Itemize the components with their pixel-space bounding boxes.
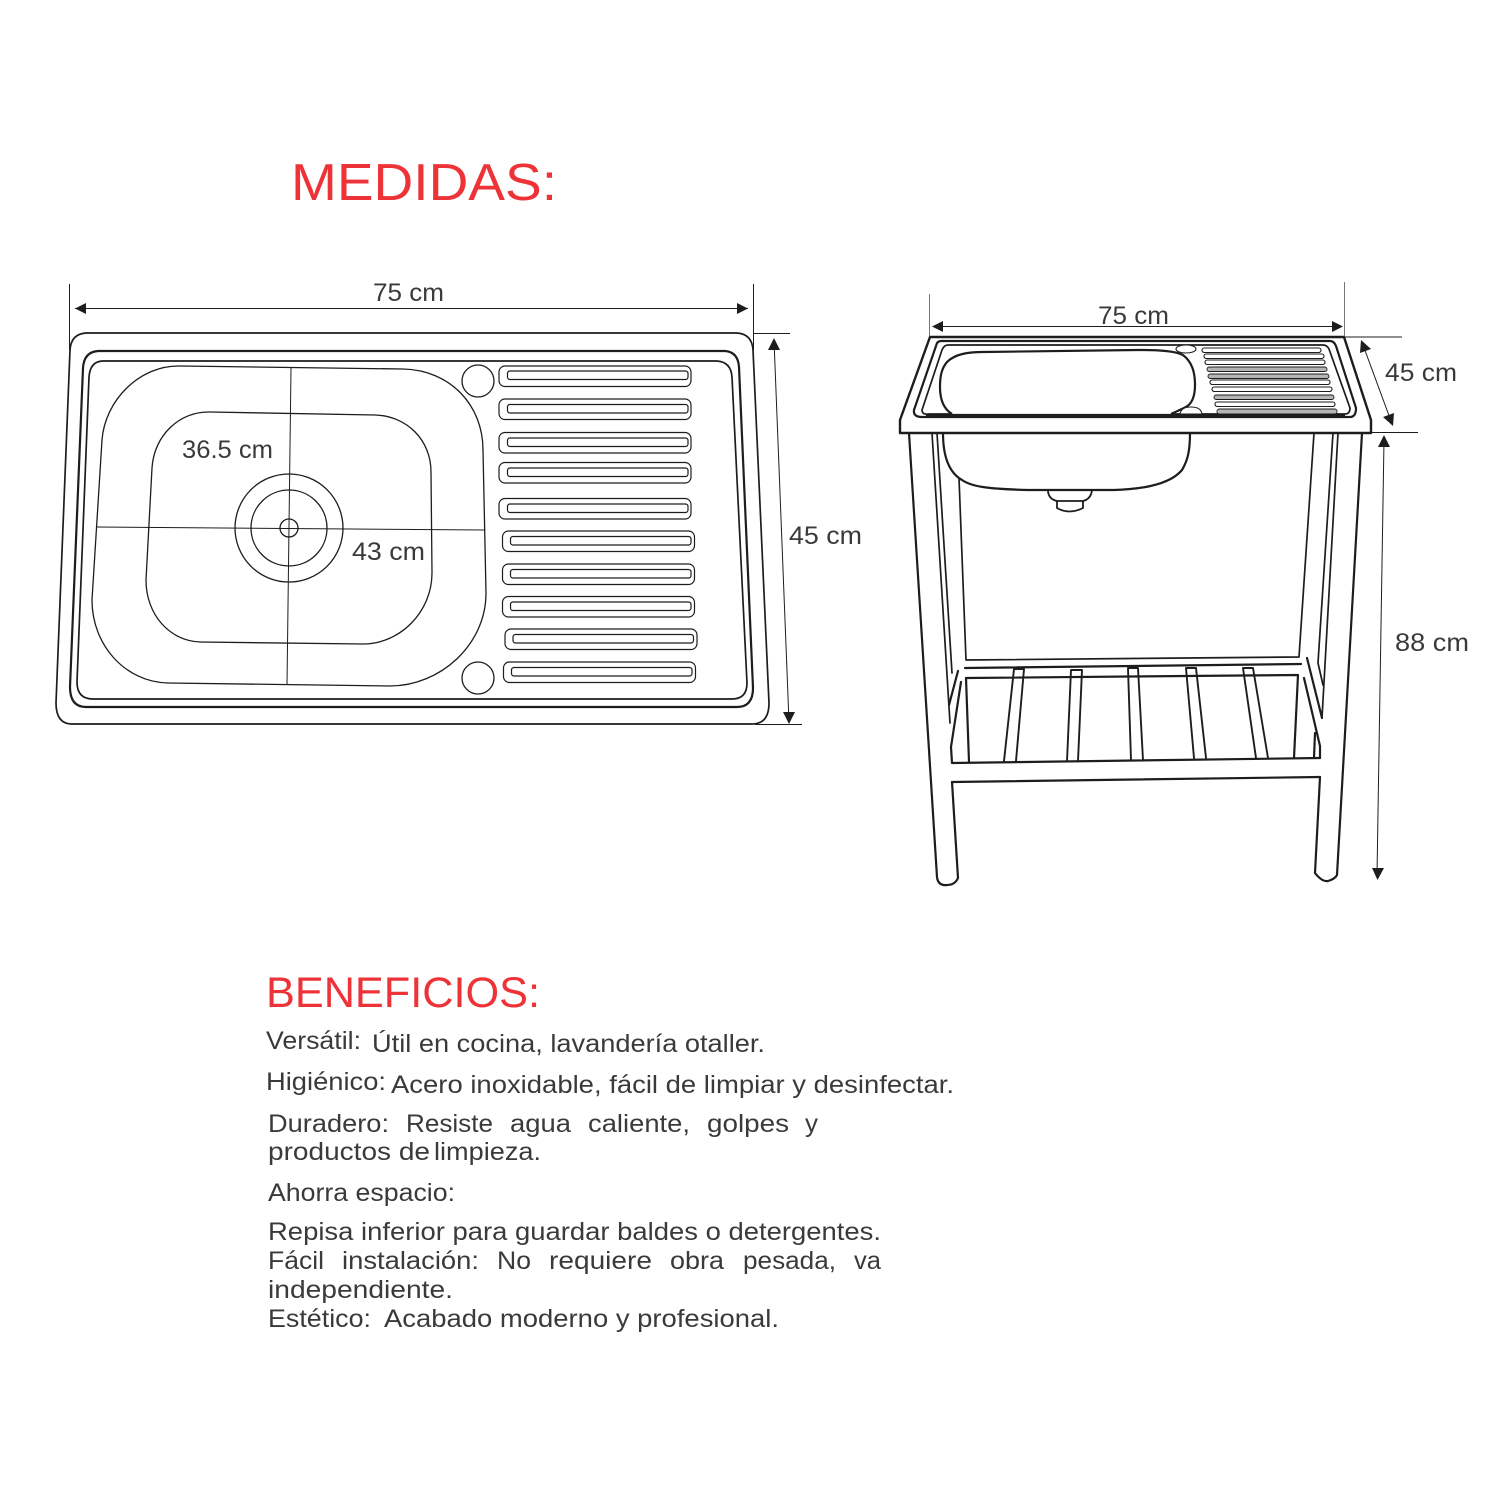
benefit: easy installation: independiente.	[268, 1276, 453, 1304]
basin outer edge	[92, 366, 486, 686]
benefit: easy installation: instalación:	[342, 1247, 479, 1275]
benefit: easy installation	[268, 1247, 881, 1304]
dimension lines: depth	[753, 334, 802, 724]
benefit: durable: golpes	[707, 1110, 789, 1138]
front right leg	[1315, 433, 1362, 881]
benefit: hygienic: Acero inoxidable, fácil de limpiar y desinfectar.	[391, 1071, 954, 1099]
label: height: 88 cm	[1395, 629, 1469, 657]
diagram: sink top view	[56, 279, 862, 724]
drain circles	[235, 474, 343, 582]
bowl front edge	[926, 414, 1345, 416]
sink middle rim	[70, 351, 753, 707]
benefit: aesthetic: Estético:	[268, 1305, 371, 1333]
label: width: 75 cm	[373, 279, 444, 307]
benefit: versatile	[266, 1027, 765, 1058]
benefit: durable: agua	[510, 1110, 571, 1138]
benefit: hygienic: Higiénico:	[266, 1068, 386, 1096]
shelf frame	[949, 658, 1322, 763]
benefit: easy installation: Fácil	[268, 1247, 324, 1275]
counter inner rim	[922, 345, 1350, 414]
title: medidas: MEDIDAS:	[291, 154, 557, 212]
basin underside	[943, 433, 1190, 490]
dimension lines: depth	[1344, 337, 1418, 432]
benefit: durable: Duradero:	[268, 1110, 389, 1138]
dimension lines: width	[930, 282, 1344, 336]
benefit: versatile: Útil en cocina, lavandería otaller.	[372, 1029, 765, 1058]
benefit: durable: Resiste	[406, 1110, 493, 1138]
label: depth: 45 cm	[1385, 359, 1457, 387]
faucet holes	[1176, 345, 1202, 414]
drainboard grooves	[1202, 348, 1337, 414]
benefit: easy installation: requiere	[549, 1247, 652, 1275]
benefit: saves space	[268, 1179, 881, 1246]
benefits text block	[266, 1027, 954, 1333]
drainboard grooves	[499, 366, 697, 682]
benefit: durable: limpieza.	[434, 1138, 541, 1166]
basin inner edge	[146, 412, 432, 644]
benefit: durable: y	[805, 1110, 819, 1138]
counter outer rim	[914, 341, 1356, 417]
label: depth: 45 cm	[789, 522, 862, 550]
label: basin depth: 36.5 cm	[182, 436, 273, 464]
benefit: hygienic	[266, 1068, 954, 1099]
heading: beneficios: BENEFICIOS:	[266, 969, 540, 1017]
drain fitting	[1048, 490, 1092, 512]
benefit: durable: productos de	[268, 1138, 430, 1166]
dimension lines: height	[1372, 435, 1390, 880]
label: width: 75 cm	[1098, 302, 1169, 330]
shelf slats	[1004, 668, 1268, 761]
lower crossbar	[952, 777, 1320, 782]
benefit: versatile: Versátil:	[266, 1027, 361, 1055]
benefit: saves space: Ahorra espacio:	[268, 1179, 455, 1207]
bowl opening	[940, 350, 1195, 414]
faucet holes	[462, 365, 494, 694]
sink outer rim	[56, 333, 769, 724]
benefit: aesthetic: Acabado moderno y profesional.	[384, 1305, 779, 1333]
rear and inner legs	[932, 433, 1338, 723]
basin centre lines	[97, 368, 485, 685]
label: basin width: 43 cm	[352, 538, 425, 566]
sink inner rim	[77, 361, 747, 699]
benefit: durable: caliente,	[588, 1110, 690, 1138]
benefit: easy installation: No	[497, 1247, 531, 1275]
benefit: durable	[268, 1110, 819, 1166]
benefit: saves space: Repisa inferior para guardar baldes o detergentes.	[268, 1218, 881, 1246]
front left leg	[909, 433, 958, 885]
diagram: sink with stand, front view	[900, 282, 1469, 885]
benefit: easy installation: obra	[670, 1247, 724, 1275]
benefit: easy installation: pesada,	[743, 1247, 836, 1275]
dimension lines: width	[70, 284, 754, 350]
benefit: easy installation: va	[854, 1247, 881, 1275]
countertop	[900, 337, 1371, 433]
